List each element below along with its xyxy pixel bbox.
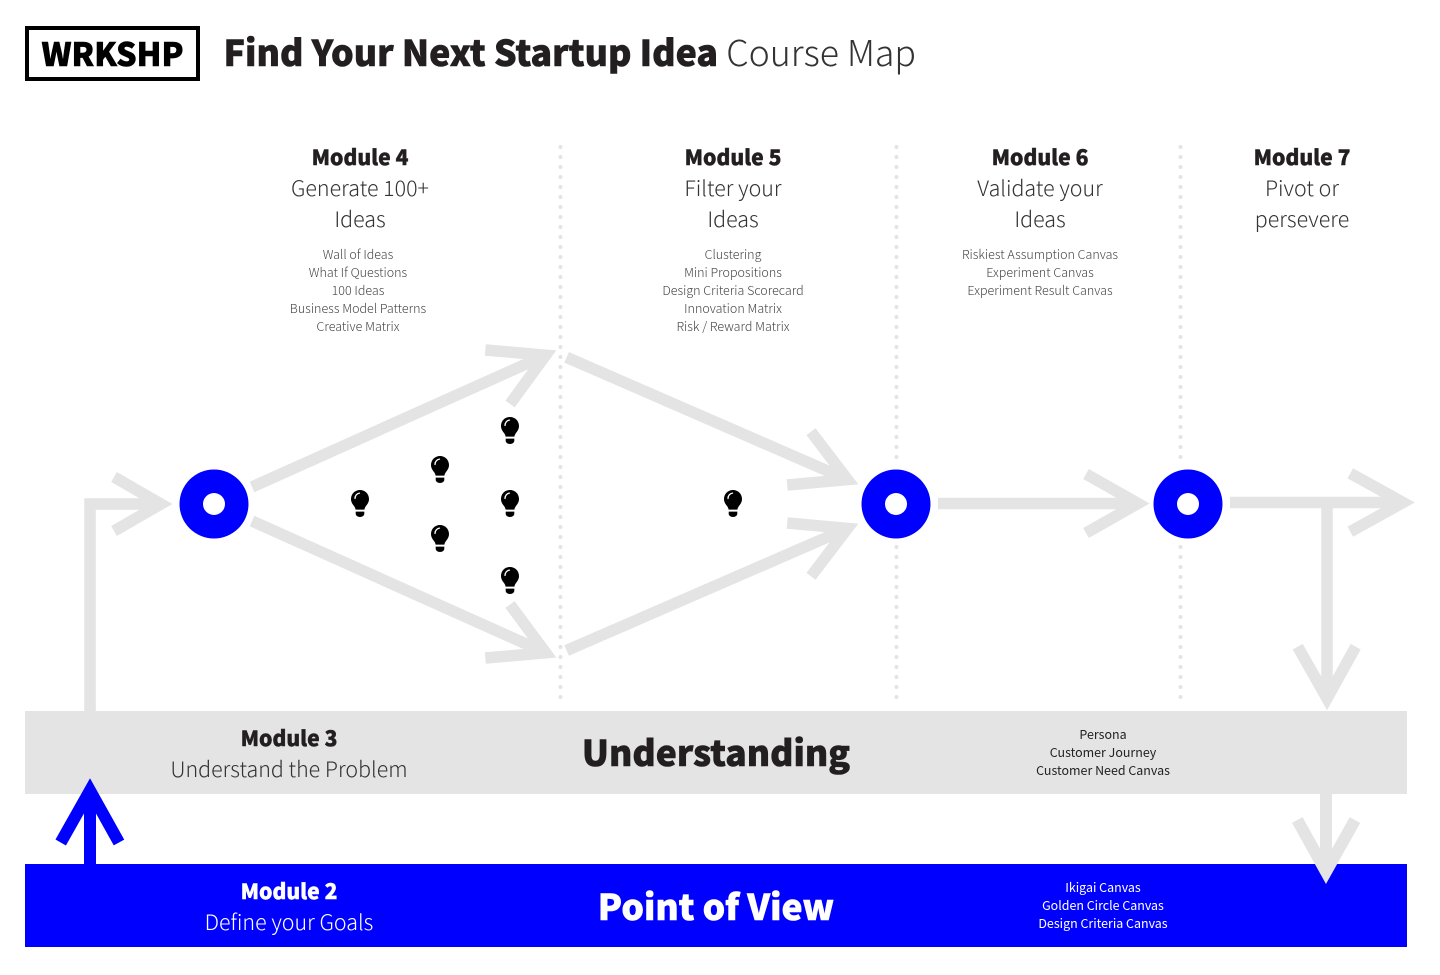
node: first [180, 470, 248, 538]
icon: idea bulb [351, 490, 369, 517]
panel: module 4: Business Model Patterns [290, 298, 427, 317]
arrow: pivot down to Understanding [1298, 502, 1356, 698]
arrow: diverge down to module 5 boundary [252, 521, 546, 658]
icon: filtered idea bulb [724, 490, 742, 517]
panel: Understanding band: Customer Journey [1050, 743, 1157, 761]
panel: module 6: Riskiest Assumption Canvas [962, 244, 1118, 263]
icon: idea bulb [501, 417, 519, 444]
arrow: diverge up to module 5 boundary [252, 350, 546, 487]
panel: Understanding band: Persona [1079, 725, 1127, 743]
logo: WRKSHP: WRKSHP [42, 30, 183, 76]
panel: module 5: Filter your [684, 172, 782, 203]
panel: module 7: persevere [1255, 203, 1349, 234]
panel: module 4 [290, 142, 429, 335]
node: second [862, 470, 930, 538]
panel: module 5: Ideas [707, 203, 759, 234]
panel: module 6: Experiment Result Canvas [967, 280, 1113, 299]
arrow: converge from bottom to second node [567, 523, 848, 650]
icon: idea bulb [431, 525, 449, 552]
panel: module 4: Wall of Ideas [323, 244, 394, 263]
panel: Point of View band: Point of View [598, 880, 834, 931]
panel: module 4: What If Questions [309, 262, 408, 281]
dotted divider: modules 5 and 6 [894, 147, 898, 698]
panel: Understanding band [25, 711, 1407, 794]
arrow: second node to third node [938, 474, 1138, 533]
icon: idea bulb [501, 490, 519, 517]
arrow: Understanding down to Point of View [1297, 794, 1355, 872]
icon: idea bulb [501, 567, 519, 594]
panel: module 6: Module 6 [992, 142, 1088, 172]
panel: module 6: Ideas [1014, 203, 1066, 234]
panel: module 4: Creative Matrix [317, 316, 400, 335]
panel: Point of View band: Golden Circle Canvas [1042, 896, 1164, 914]
panel: module 4: Ideas [334, 203, 386, 234]
panel: Point of View band [25, 864, 1407, 947]
panel: module 6 [962, 142, 1118, 299]
panel: module 5: Clustering [705, 244, 762, 263]
panel: module 4: 100 Ideas [332, 280, 385, 299]
panel: module 4: Module 4 [312, 142, 409, 172]
title: Find Your Next Startup Idea Course Map [224, 26, 916, 77]
panel: Point of View band: Define your Goals [205, 906, 373, 937]
node: third [1154, 470, 1222, 538]
panel: Understanding band: Understanding [582, 726, 850, 777]
panel: module 5: Risk / Reward Matrix [676, 316, 790, 335]
panel: Understanding band: Understand the Problem [170, 753, 408, 784]
arrow: third node onward [1230, 473, 1403, 532]
panel: Understanding band: Module 3 [241, 723, 337, 753]
panel: module 4: Generate 100+ [291, 172, 429, 203]
panel: Point of View band: Ikigai Canvas [1065, 878, 1141, 896]
panel: module 7: Module 7 [1254, 142, 1350, 172]
panel: module 5 [662, 142, 804, 335]
panel: module 5: Design Criteria Scorecard [662, 280, 804, 299]
panel: Point of View band: Design Criteria Canvas [1038, 914, 1168, 932]
panel: module 6: Experiment Canvas [986, 262, 1094, 281]
panel: module 6: Validate your [977, 172, 1103, 203]
panel: Point of View band: Module 2 [241, 876, 337, 906]
arrow: up from Understanding into first node [90, 477, 161, 712]
panel: module 5: Module 5 [685, 142, 781, 172]
dotted divider: modules 6 and 7 [1178, 147, 1182, 698]
dotted divider: modules 4 and 5 [558, 147, 562, 698]
panel: module 7: Pivot or [1265, 172, 1339, 203]
panel: module 7 [1254, 142, 1350, 234]
icon: idea bulb [431, 456, 449, 483]
panel: module 5: Mini Propositions [684, 262, 782, 281]
arrow: Point of View up to Understanding [61, 790, 119, 865]
panel: module 5: Innovation Matrix [684, 298, 782, 317]
panel: Understanding band: Customer Need Canvas [1036, 761, 1170, 779]
arrow: converge from top to second node [567, 357, 848, 485]
